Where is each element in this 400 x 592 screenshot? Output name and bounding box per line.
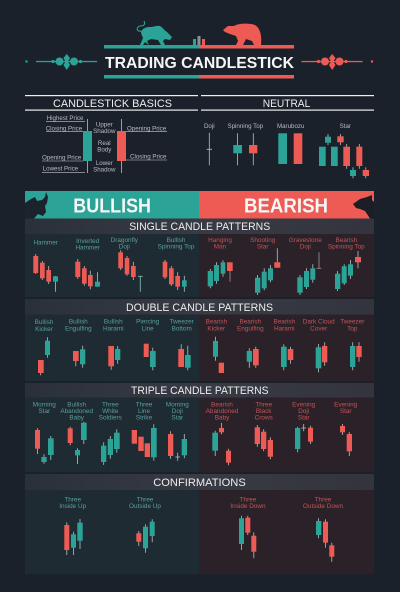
- tweezer top: Top: [347, 325, 358, 332]
- gravestone doji: Doji: [300, 243, 311, 250]
- evening doji star: Evening: [292, 401, 316, 408]
- bullish kicker: [35, 319, 54, 375]
- top rule: [104, 45, 294, 48]
- tweezer top: Tweezer: [340, 318, 365, 325]
- three outside up: Three: [137, 496, 154, 503]
- header: [25, 21, 373, 78]
- section: triple candle patterns: [25, 383, 374, 465]
- bearish harami: Bearish: [273, 318, 296, 325]
- bearish engulfing: Bearish: [239, 318, 262, 325]
- shooting star: Star: [257, 243, 269, 250]
- three white soldiers: Soldiers: [99, 415, 122, 422]
- section: confirmations: [25, 474, 374, 562]
- bearish kicker: [205, 318, 228, 373]
- section: single candle patterns: [25, 218, 374, 295]
- bearish abandoned baby: [206, 401, 239, 465]
- bullish engulfing: [65, 318, 92, 368]
- heading band: [25, 383, 374, 398]
- shooting star: Shooting: [250, 237, 276, 244]
- three inside down: [230, 496, 266, 558]
- bearish harami: [273, 318, 296, 370]
- centre labels: [93, 121, 116, 173]
- dark cloud cover: [303, 318, 335, 372]
- three black crows: [255, 401, 273, 459]
- hanging man: Man: [214, 243, 227, 250]
- heading: neutral: NEUTRAL: [263, 98, 310, 110]
- banner: bearish: [199, 191, 374, 218]
- morning doji star: Morning: [166, 401, 189, 408]
- heading band: [25, 299, 374, 314]
- piercing line: [136, 318, 160, 370]
- morning star: Morning: [33, 401, 56, 408]
- icon: bear: [223, 24, 261, 45]
- bullish engulfing: Engulfing: [65, 325, 92, 332]
- bullish kicker: Bullish: [35, 319, 54, 326]
- ornament left: [25, 54, 97, 70]
- piercing line: Line: [142, 325, 154, 332]
- bearish engulfing: [237, 318, 264, 368]
- piercing line: Piercing: [136, 318, 160, 325]
- banner: bullish: [25, 191, 199, 218]
- heading band: SINGLE CANDLE PATTERNS: [129, 221, 270, 233]
- morning star: [33, 401, 56, 464]
- left price labels: Opening Price: [42, 155, 82, 162]
- spinning top: Spinning Top: [227, 123, 264, 130]
- hammer: [33, 239, 59, 292]
- left price labels: Highest Price: [47, 115, 84, 122]
- bearish abandoned baby: Abandoned: [206, 408, 239, 415]
- three white soldiers: White: [102, 408, 119, 415]
- centre labels: Lower: [96, 160, 113, 167]
- tweezer bottom: Tweezer: [170, 318, 195, 325]
- section: double candle patterns: [25, 299, 374, 375]
- three outside down: [303, 496, 344, 562]
- star: [319, 123, 369, 178]
- bearish abandoned baby: Bearish: [211, 401, 233, 408]
- three inside down: Three: [240, 496, 257, 503]
- three inside down: Inside Down: [230, 503, 266, 510]
- doji: Doji: [204, 123, 215, 130]
- bearish engulfing: Engulfing: [237, 325, 264, 332]
- centre labels: Body: [97, 146, 112, 153]
- three line strike: Three: [136, 401, 153, 408]
- panel backgrounds: [25, 218, 374, 574]
- bearish kicker: Kicker: [207, 325, 226, 332]
- three outside up: [129, 496, 161, 553]
- bullish spinning top: Bullish: [167, 237, 186, 244]
- inverted hammer: [75, 238, 101, 289]
- left price labels: Lowest Price: [43, 166, 79, 173]
- hanging man: Hanging: [208, 237, 232, 244]
- centre labels: Shadow: [93, 166, 116, 173]
- bearish kicker: Bearish: [205, 318, 228, 325]
- bullish harami: Harami: [103, 325, 124, 332]
- three outside up: Outside Up: [129, 503, 161, 510]
- morning doji star: Doji: [172, 408, 183, 415]
- panel: candlestick basics: [25, 95, 198, 173]
- icon: small candles: [193, 36, 205, 45]
- bullish abandoned baby: Abandoned: [60, 408, 93, 415]
- tweezer bottom: [170, 318, 195, 370]
- bullish spinning top: Spinning Top: [158, 244, 195, 251]
- heading band: [25, 218, 374, 234]
- bullish harami: [103, 318, 124, 370]
- evening doji star: Doji: [298, 408, 309, 415]
- left price labels: Closing Price: [46, 125, 83, 132]
- bullish abandoned baby: Baby: [69, 415, 85, 422]
- marubozu: [277, 123, 305, 164]
- dragonfly doji: [111, 237, 143, 292]
- dark cloud cover: Cover: [310, 325, 328, 332]
- bullish abandoned baby: Bullish: [67, 401, 87, 408]
- bearish harami: Harami: [274, 325, 295, 332]
- hanging man: [208, 237, 233, 288]
- inverted hammer: Hammer: [75, 244, 101, 251]
- icon: bull: [137, 21, 172, 45]
- bearish spinning top: Bearish: [335, 237, 358, 244]
- three line strike: Line: [138, 408, 150, 415]
- three inside up: [59, 496, 87, 555]
- bullish anatomy candle: [83, 119, 92, 173]
- three inside up: Three: [64, 496, 81, 503]
- right price labels: Opening Price: [127, 125, 167, 132]
- dark cloud cover: Dark Cloud: [303, 318, 335, 325]
- ornament right: [302, 54, 373, 70]
- hammer: Hammer: [33, 239, 59, 246]
- bullish abandoned baby: [60, 401, 93, 464]
- spinning top: [227, 123, 264, 165]
- shooting star: [250, 237, 280, 295]
- three white soldiers: [99, 401, 122, 465]
- panel: neutral: [201, 95, 374, 178]
- bottom rule: [104, 75, 294, 78]
- morning doji star: Star: [171, 415, 184, 422]
- heading band: TRIPLE CANDLE PATTERNS: [131, 385, 269, 397]
- icon: bear head: [353, 195, 374, 218]
- centre labels: Upper: [96, 121, 113, 128]
- title: TRADING CANDLESTICK: [105, 55, 294, 72]
- icon: bull head: [25, 192, 48, 218]
- three black crows: Three: [255, 401, 272, 408]
- three outside down: Outside Down: [303, 503, 344, 510]
- centre labels: Real: [98, 140, 111, 147]
- heading: candlestick basics: CANDLESTICK BASICS: [53, 98, 172, 110]
- bullish engulfing: Bullish: [69, 318, 88, 325]
- three white soldiers: Three: [102, 401, 119, 408]
- right price labels: [126, 125, 167, 161]
- bearish anatomy candle: [117, 119, 126, 173]
- right price labels: Closing Price: [130, 154, 167, 161]
- bullish kicker: Kicker: [35, 326, 54, 333]
- morning star: Star: [38, 408, 51, 415]
- evening star: Star: [340, 408, 352, 415]
- gravestone doji: [289, 237, 322, 295]
- marubozu: Marubozu: [277, 123, 305, 130]
- dragonfly doji: Doji: [119, 243, 130, 250]
- gravestone doji: Gravestone: [289, 237, 322, 244]
- evening doji star: [292, 401, 316, 452]
- heading: bearish: BEARISH: [244, 195, 328, 217]
- bearish spinning top: Spinning Top: [328, 244, 365, 251]
- heading band: DOUBLE CANDLE PATTERNS: [126, 302, 273, 314]
- doji: [204, 123, 215, 165]
- three black crows: Black: [256, 408, 272, 415]
- bullish harami: Bullish: [104, 318, 123, 325]
- heading band: [25, 474, 374, 490]
- dragonfly doji: Dragonfly: [111, 237, 139, 244]
- three outside down: Three: [315, 496, 332, 503]
- morning doji star: [166, 401, 189, 461]
- inverted hammer: Inverted: [76, 238, 100, 245]
- centre labels: Shadow: [93, 128, 116, 135]
- evening star: [334, 401, 358, 456]
- evening doji star: Star: [298, 415, 310, 422]
- star: Star: [340, 123, 351, 130]
- evening star: Evening: [334, 401, 358, 408]
- three line strike: [132, 401, 157, 461]
- three inside up: Inside Up: [59, 503, 87, 510]
- tweezer top: [340, 318, 365, 370]
- three line strike: Strike: [136, 415, 153, 422]
- bearish abandoned baby: Baby: [215, 415, 230, 422]
- heading: bullish: BULLISH: [73, 195, 151, 217]
- bearish spinning top: [328, 237, 365, 291]
- left price labels: [42, 115, 85, 173]
- tweezer bottom: Bottom: [172, 325, 192, 332]
- bullish spinning top: [158, 237, 195, 292]
- three black crows: Crows: [255, 415, 273, 422]
- heading band: CONFIRMATIONS: [153, 477, 246, 489]
